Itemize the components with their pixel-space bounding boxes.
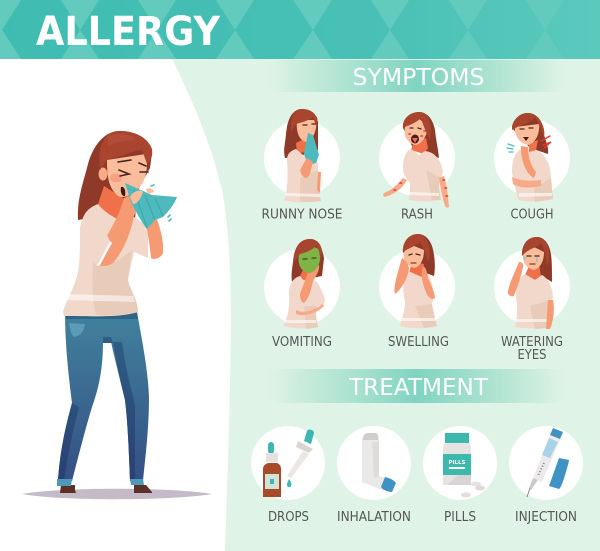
main figure: woman sneezing xyxy=(22,131,212,499)
neck xyxy=(98,186,126,220)
treatment: injection xyxy=(509,426,583,525)
label: RUNNY NOSE xyxy=(262,206,342,222)
treatment: inhalation xyxy=(337,426,411,525)
header banner xyxy=(0,0,600,59)
label: WATERING xyxy=(501,334,563,350)
label: PILLS xyxy=(444,509,476,525)
blush xyxy=(110,174,122,182)
treatment heading band: TREATMENT xyxy=(348,373,489,401)
treatment: pills: PILLS xyxy=(448,460,466,466)
label: SWELLING xyxy=(388,334,449,350)
label: VOMITING xyxy=(272,334,332,350)
jeans pocket xyxy=(69,323,85,337)
symptom: rash xyxy=(379,112,455,222)
right forearm xyxy=(146,216,163,259)
dropper xyxy=(287,451,309,478)
jeans xyxy=(58,312,149,481)
jeans cuffs xyxy=(57,479,144,486)
treatment heading band xyxy=(262,369,572,403)
hand xyxy=(130,188,154,204)
label line two: EYES xyxy=(518,347,546,363)
symptom: cough xyxy=(494,113,570,222)
open mouth xyxy=(121,187,125,196)
shirt stripes xyxy=(65,294,135,302)
symptoms heading band xyxy=(262,60,572,92)
white left panel xyxy=(0,59,231,551)
treatment: drops xyxy=(251,426,325,525)
symptom: vomiting xyxy=(264,239,340,350)
left arm xyxy=(97,192,139,266)
face xyxy=(107,154,147,197)
treatment: pills xyxy=(423,426,497,525)
sleeve xyxy=(82,222,110,266)
tissue xyxy=(125,183,177,229)
bottle xyxy=(268,442,274,454)
symptom: runny nose xyxy=(262,109,342,222)
label: DROPS xyxy=(268,509,309,525)
label: INHALATION xyxy=(337,509,411,525)
symptom: swelling xyxy=(379,234,455,350)
symptoms heading band: SYMPTOMS xyxy=(352,63,484,91)
ear xyxy=(98,168,108,180)
sneeze droplets xyxy=(151,185,171,221)
symptom: watering eyes xyxy=(494,237,570,363)
title: ALLERGY xyxy=(36,9,221,55)
ground shadow xyxy=(22,489,212,499)
shirt xyxy=(63,204,148,316)
label: RASH xyxy=(401,206,433,222)
hair fringe xyxy=(99,131,152,170)
shoes xyxy=(60,485,152,493)
shirt shading xyxy=(92,250,138,315)
label: INJECTION xyxy=(515,509,577,525)
hair back xyxy=(78,131,152,220)
label: COUGH xyxy=(510,206,554,222)
jeans shading xyxy=(58,312,138,481)
eyes and brows xyxy=(118,160,148,176)
